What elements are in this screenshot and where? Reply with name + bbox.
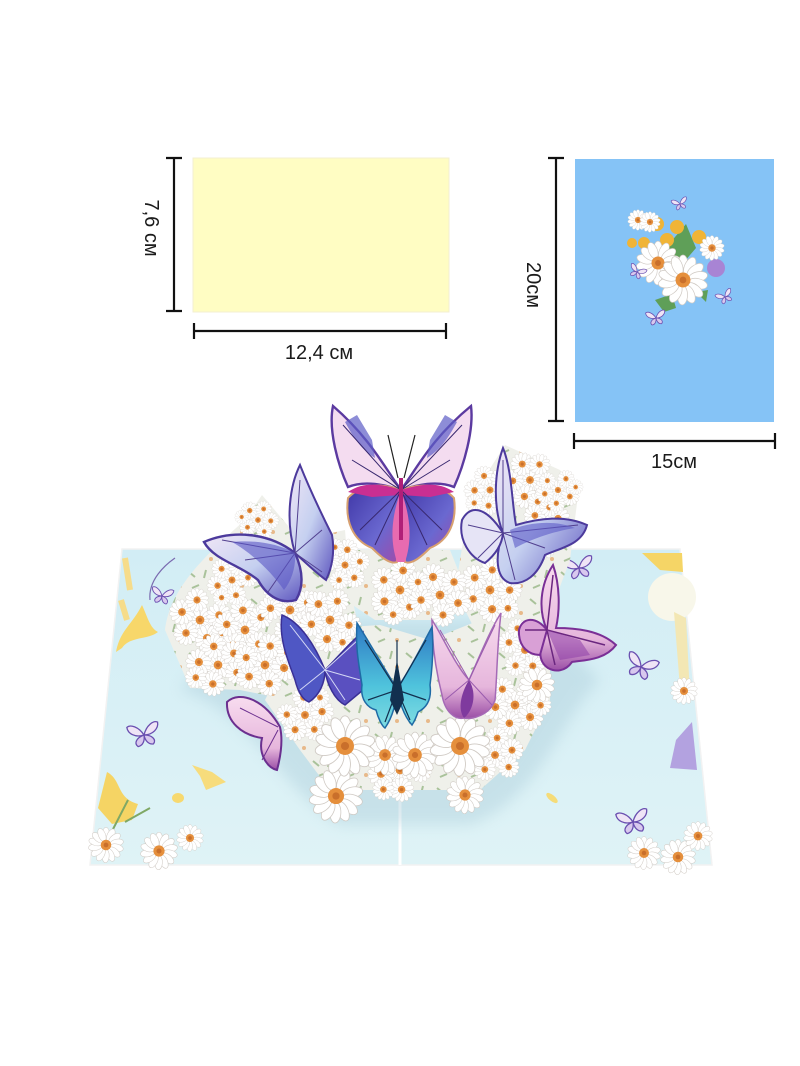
dimension: height 20 cm: 20см [522,262,544,308]
butterfly: main top [332,406,472,563]
small butterflies on card front [627,197,735,326]
flower mass silhouettes [165,445,578,790]
card base panels [90,549,712,865]
dimension: width 12,4 cm [194,323,446,364]
daisy clusters [165,440,590,823]
butterfly: blue purple lower [281,615,363,705]
pop-up shadow [180,620,600,825]
butterfly: pink lower [432,613,501,718]
card printed decoration [88,553,713,875]
butterfly: right purple [519,565,616,670]
dimension: height 20 cm [522,158,564,421]
yellow card back [193,158,449,312]
open pop-up card [88,406,713,875]
dimension: width 15 cm [574,433,775,473]
dimension: height 7,6 cm [140,157,182,311]
butterfly: right large [461,448,587,583]
butterfly: left large [204,465,333,601]
dimension: width 12,4 cm: 12,4 см [285,342,353,364]
butterfly: small lower left [227,697,281,770]
blue card front [575,159,774,422]
dimension: height 7,6 cm: 7,6 см [140,199,162,257]
butterfly: cyan centre [357,623,433,728]
dimension: width 15 cm: 15см [651,451,697,473]
bouquet on card front [627,210,725,312]
